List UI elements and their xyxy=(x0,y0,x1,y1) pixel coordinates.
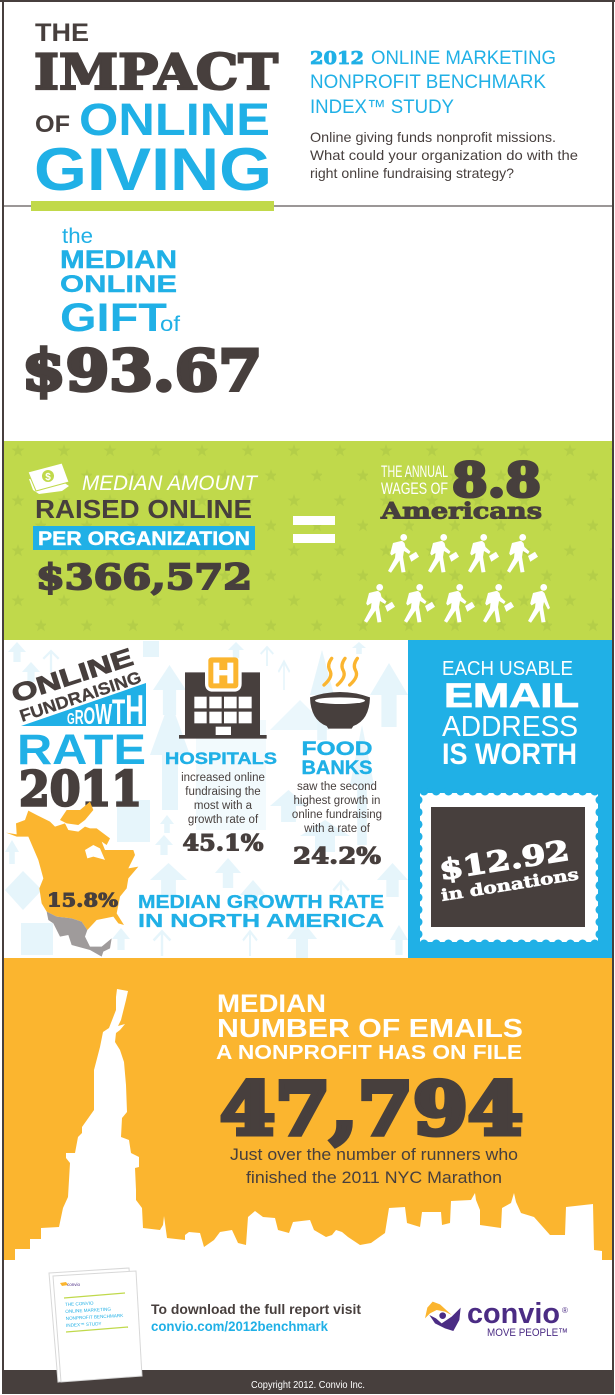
hospitals text xyxy=(165,749,277,856)
hospitals text: increased online xyxy=(181,772,265,784)
panel: median online gift: MEDIAN xyxy=(60,246,177,274)
equals sign xyxy=(293,516,335,543)
logo: convio: convio xyxy=(467,1298,560,1330)
icon: soup bowl xyxy=(310,658,370,729)
study title: ONLINE MARKETING xyxy=(371,48,556,69)
title: THE xyxy=(35,19,89,47)
growth rate heading: FUNDRAISING xyxy=(17,668,144,726)
amount: $366,572 xyxy=(36,557,252,598)
growth rate heading: 2011 xyxy=(19,762,142,818)
median amount label: MEDIAN AMOUNT xyxy=(82,472,259,495)
download text xyxy=(151,1301,361,1334)
marathon comparison: Just over the number of runners who xyxy=(230,1145,518,1164)
panel: median online gift: ONLINE xyxy=(60,271,177,298)
study title: INDEX™ STUDY xyxy=(310,97,454,118)
logo: convio xyxy=(425,1298,568,1339)
hospitals text: most with a xyxy=(194,800,253,812)
email heading: ADDRESS xyxy=(442,711,578,743)
median growth caption xyxy=(138,891,384,931)
title: IMPACT xyxy=(34,43,278,101)
hospitals text: HOSPITALS xyxy=(165,749,277,768)
growth rate heading xyxy=(8,643,146,818)
marathon comparison: finished the 2011 NYC Marathon xyxy=(246,1168,502,1187)
stamp: in donations xyxy=(440,864,580,905)
icon: walking workers xyxy=(364,534,550,623)
annual wages label: THE ANNUAL xyxy=(381,462,448,481)
food banks text: FOOD xyxy=(302,739,372,760)
icon: money: $ xyxy=(45,472,51,483)
title: ONLINE xyxy=(79,94,270,145)
title: OF xyxy=(35,111,70,138)
download text: convio.com/2012benchmark xyxy=(151,1318,328,1334)
stamp xyxy=(418,791,600,944)
panel: median online gift: GIFT xyxy=(60,296,167,340)
panel: median online gift: the xyxy=(62,225,93,248)
skyline silhouette xyxy=(15,989,602,1260)
report cover: INDEX™ STUDY xyxy=(66,1321,102,1328)
food banks text: saw the second xyxy=(297,781,377,793)
panel: median number of emails xyxy=(2,958,613,1260)
hospitals text: 45.1% xyxy=(182,830,264,856)
download text: To download the full report visit xyxy=(151,1301,361,1317)
panel: median online gift: $93.67 xyxy=(22,338,262,404)
panel: header xyxy=(2,19,613,211)
annual wages label: 8.8 xyxy=(452,454,541,508)
hospitals text: fundraising the xyxy=(185,786,261,798)
annual wages label: WAGES OF xyxy=(381,479,448,498)
emails heading: A NONPROFIT HAS ON FILE xyxy=(216,1042,522,1064)
annual wages label: Americans xyxy=(380,498,542,524)
map: north america xyxy=(6,802,138,957)
panel: footer download xyxy=(2,1268,613,1394)
logo: convio: ® xyxy=(562,1306,568,1315)
study title xyxy=(310,48,556,118)
emails heading xyxy=(216,990,523,1064)
panel: median amount raised xyxy=(2,441,613,640)
intro text: Online giving funds nonprofit missions. xyxy=(310,129,556,145)
report cover: NONPROFIT BENCHMARK xyxy=(66,1313,124,1321)
email heading: IS WORTH xyxy=(442,738,577,771)
food banks text: with a rate of xyxy=(303,823,371,835)
report cover: ONLINE MARKETING xyxy=(65,1307,112,1314)
food banks text xyxy=(292,739,382,870)
report cover: THE CONVIO xyxy=(65,1300,94,1307)
median growth caption: IN NORTH AMERICA xyxy=(138,910,384,931)
logo: convio: MOVE PEOPLE™ xyxy=(487,1327,568,1339)
copyright bar xyxy=(2,1370,613,1394)
food banks text: highest growth in xyxy=(294,795,380,807)
annual wages label xyxy=(380,454,542,524)
hospitals text: growth rate of xyxy=(188,814,259,826)
panel: median online gift: of xyxy=(160,313,180,336)
growth rate heading: GROWTH xyxy=(67,686,144,733)
panel: median online gift xyxy=(22,225,262,404)
emails heading: MEDIAN xyxy=(217,990,326,1018)
panel: online fundraising growth xyxy=(5,641,408,958)
study title: 2012 xyxy=(310,48,364,69)
report cover: convio xyxy=(67,1282,81,1287)
email heading xyxy=(442,658,579,771)
title underline xyxy=(31,201,274,211)
intro text: What could your organization do with the xyxy=(310,147,578,163)
median growth caption: MEDIAN GROWTH RATE xyxy=(138,891,384,912)
report cover xyxy=(49,1268,142,1382)
marathon comparison xyxy=(230,1145,518,1187)
email heading: EACH USABLE xyxy=(442,658,573,680)
panel: email address worth xyxy=(408,640,613,958)
email heading: EMAIL xyxy=(444,677,579,715)
raised online label: RAISED ONLINE xyxy=(35,494,252,524)
title xyxy=(34,19,278,203)
icon: money xyxy=(28,463,69,494)
icon: hospital xyxy=(179,657,267,739)
study title: NONPROFIT BENCHMARK xyxy=(310,72,546,93)
food banks text: online fundraising xyxy=(292,809,382,821)
emails number: 47,794 xyxy=(220,1066,523,1151)
intro text: right online fundraising strategy? xyxy=(310,165,514,181)
food banks text: BANKS xyxy=(302,758,372,779)
title: GIVING xyxy=(34,136,272,203)
growth rate heading: ONLINE xyxy=(8,643,137,709)
emails heading: NUMBER OF EMAILS xyxy=(217,1013,523,1043)
per organization label: PER ORGANIZATION xyxy=(38,529,250,550)
header divider xyxy=(2,205,613,207)
growth rate heading: RATE xyxy=(17,726,146,774)
map value: 15.8% xyxy=(47,890,118,912)
copyright bar: Copyright 2012. Convio Inc. xyxy=(251,1380,365,1391)
stamp: $12.92 xyxy=(437,834,571,887)
intro text xyxy=(310,129,578,181)
food banks text: 24.2% xyxy=(293,844,381,870)
